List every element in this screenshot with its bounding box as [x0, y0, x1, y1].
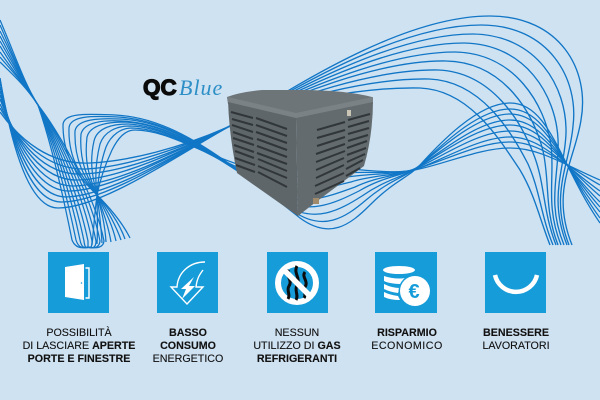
logo: QC Blue: Blue — [179, 75, 223, 100]
icon: energy arrow — [157, 252, 218, 313]
icon: smile — [485, 252, 546, 313]
airflow lines: bundle from top left falling to the icons — [0, 20, 104, 248]
badge — [347, 110, 351, 116]
machine top — [227, 90, 373, 120]
logo: QC Blue — [143, 75, 223, 100]
caption line: economico: ECONOMICO — [371, 340, 443, 352]
caption line: porte e finestre: PORTE E FINESTRE — [28, 353, 130, 365]
machine top rim — [228, 97, 373, 118]
icon: coins: € — [408, 281, 420, 303]
caption: benessere: BENESSERE — [483, 327, 549, 339]
feature: savings — [375, 252, 437, 339]
caption line: lavoratori: LAVORATORI — [482, 340, 550, 352]
caption: risparmio: RISPARMIO — [377, 327, 437, 339]
feature: low energy use — [157, 252, 218, 339]
right face louvers — [315, 114, 370, 194]
caption: possibilità: POSSIBILITÀ — [46, 326, 113, 339]
feature: no refrigerant gas — [267, 252, 328, 339]
caption line: energetico: ENERGETICO — [153, 353, 223, 365]
airflow lines: bundle from left through machine to upper right — [0, 16, 583, 245]
machine right face — [296, 100, 373, 216]
logo: QC Blue: QC — [143, 75, 177, 100]
feature: worker wellbeing — [483, 252, 549, 339]
drain fitting — [313, 198, 319, 204]
icon: no gas — [267, 252, 328, 313]
caption line: aperte: DI LASCIARE APERTE — [23, 340, 135, 352]
icon: door — [48, 252, 109, 313]
machine left face — [228, 100, 298, 216]
air cooler machine — [227, 90, 373, 216]
feature: open doors — [46, 252, 113, 339]
left face louvers — [231, 112, 287, 187]
caption line: utilizzo di gas: UTILIZZO DI GAS — [253, 340, 341, 352]
caption: nessun: NESSUN — [275, 327, 319, 339]
caption line: consumo: CONSUMO — [160, 340, 216, 352]
caption line: refrigeranti: REFRIGERANTI — [257, 353, 337, 365]
caption: basso consumo energetico: BASSO — [169, 327, 207, 339]
airflow lines: looping bundle passing under machine to the right edge — [63, 103, 600, 245]
